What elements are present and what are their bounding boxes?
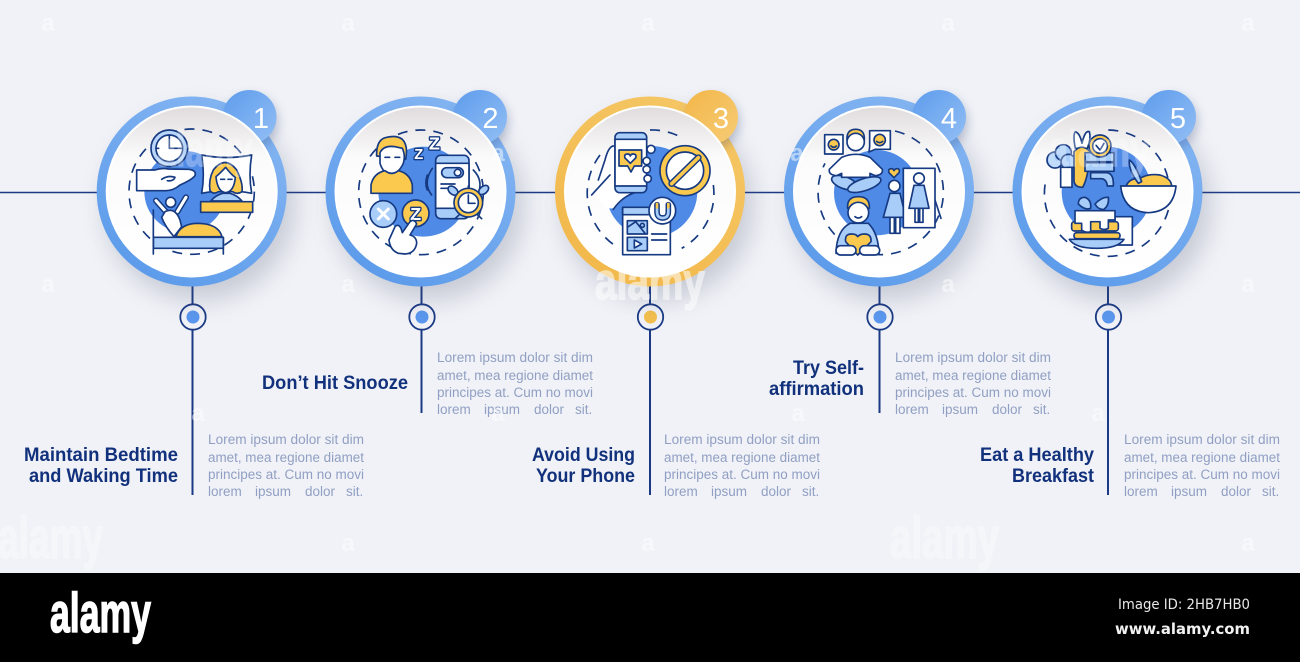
badge 5 <box>1142 90 1196 144</box>
stock watermarks: a <box>791 400 805 427</box>
step 5 heading: Breakfast <box>1012 466 1095 487</box>
step 5 connector and node <box>1096 285 1121 495</box>
icon: meditating man, heart and mirror <box>818 129 943 255</box>
badge 5: 5 <box>1170 103 1186 135</box>
icon: phone in hand, prohibition sign, magnet <box>587 130 714 255</box>
step 4 description: Lorem ipsum dolor sit dim <box>895 350 1051 365</box>
icon: healthy breakfast foods <box>1044 130 1176 256</box>
step 3 description: dolor <box>761 484 792 499</box>
stock watermarks: a <box>41 10 55 37</box>
stock watermarks: a <box>341 271 355 298</box>
step 2 description: ipsum <box>484 402 520 417</box>
badge 2: 2 <box>482 103 499 135</box>
step 3 description: sit. <box>802 484 819 499</box>
stock watermarks: a <box>1241 530 1255 557</box>
step 1 description: ipsum <box>255 484 291 499</box>
badge 2 <box>453 90 507 144</box>
image id and website <box>1115 597 1250 638</box>
icon: sleep schedule with clock, woman and bed <box>129 129 254 254</box>
step 5 heading: Eat a Healthy <box>980 445 1094 466</box>
step 2 description: dolor <box>534 402 565 417</box>
step 4 heading: Try Self- <box>793 358 864 379</box>
step 2 description: amet, mea regione diamet <box>437 368 593 383</box>
step 5 description: lorem <box>1124 484 1158 499</box>
step 3 heading <box>532 445 635 487</box>
step 1 connector and node <box>180 285 206 495</box>
badge 3: 3 <box>713 103 729 135</box>
step 1 heading <box>24 445 178 487</box>
icon: sleeping man, phone alarm and snooze button: Z <box>429 133 440 153</box>
panel: step 3 circle (highlighted) <box>555 90 745 286</box>
stock watermarks: a <box>941 10 955 37</box>
step 4 description: lorem <box>895 402 929 417</box>
step 1 description: Lorem ipsum dolor sit dim <box>208 432 364 447</box>
step 2 description: sit. <box>575 402 592 417</box>
step 1 heading: and Waking Time <box>29 466 178 487</box>
stock watermarks: a <box>941 271 955 298</box>
step 1 description <box>208 432 364 499</box>
step 2 heading: Don’t Hit Snooze <box>262 373 408 394</box>
step 3 description: lorem <box>664 484 698 499</box>
stock watermarks: a <box>341 10 355 37</box>
step 3 description: ipsum <box>711 484 747 499</box>
stock watermarks: a <box>1241 271 1255 298</box>
step 4 heading: affirmation <box>769 379 864 400</box>
stock watermarks: a <box>641 530 655 557</box>
step 2 description <box>437 350 593 417</box>
footer bar <box>0 573 1300 662</box>
step 3 description: amet, mea regione diamet <box>664 450 820 465</box>
step 2 connector and node <box>409 285 435 413</box>
step 3 description: principes at. Cum no movi <box>664 467 820 482</box>
badge 1: 1 <box>253 103 269 135</box>
stock watermarks: a <box>491 400 505 427</box>
step 3 connector and node <box>638 285 663 495</box>
stock watermarks: alamy <box>1048 121 1150 177</box>
stock watermarks: a <box>1091 400 1105 427</box>
step 4 connector and node <box>867 285 893 413</box>
step 4 description: principes at. Cum no movi <box>895 385 1051 400</box>
stock watermarks: alamy <box>595 253 705 311</box>
step 2 description: Lorem ipsum dolor sit dim <box>437 350 593 365</box>
step 3 description <box>664 432 820 499</box>
step 5 description: amet, mea regione diamet <box>1124 450 1280 465</box>
stock watermarks: a <box>1241 10 1255 37</box>
stock watermarks: alamy <box>0 506 103 571</box>
step 1 description: dolor <box>305 484 336 499</box>
image id and website: www.alamy.com <box>1115 620 1250 638</box>
step 1 description: sit. <box>346 484 363 499</box>
step 5 description <box>1124 432 1280 499</box>
icon: sleeping man, phone alarm and snooze button: Z <box>414 147 423 163</box>
step 4 description: ipsum <box>942 402 978 417</box>
step 4 heading <box>769 358 864 400</box>
step 4 description: sit. <box>1033 402 1050 417</box>
stock watermarks: a <box>341 530 355 557</box>
step 5 description: ipsum <box>1171 484 1207 499</box>
step 5 description: sit. <box>1262 484 1279 499</box>
stock watermarks: a <box>641 10 655 37</box>
panel: step 1 circle <box>97 90 287 286</box>
timeline horizontal line <box>0 192 1300 194</box>
step 3 heading: Avoid Using <box>532 445 635 466</box>
step 2 description: lorem <box>437 402 471 417</box>
step 3 heading: Your Phone <box>536 466 635 487</box>
step 2 description: principes at. Cum no movi <box>437 385 593 400</box>
icon: sleeping man, phone alarm and snooze button <box>359 130 490 255</box>
badge 4 <box>912 90 966 144</box>
panel: step 4 circle <box>784 90 974 286</box>
step 5 heading <box>980 445 1095 487</box>
footer logo: alamy <box>50 581 151 644</box>
step 5 description: dolor <box>1221 484 1252 499</box>
stock watermarks: a <box>41 271 55 298</box>
step 1 description: lorem <box>208 484 242 499</box>
panel: step 2 circle <box>326 90 516 286</box>
step 1 description: principes at. Cum no movi <box>208 467 364 482</box>
step 1 heading: Maintain Bedtime <box>24 445 178 466</box>
step 5 description: Lorem ipsum dolor sit dim <box>1124 432 1280 447</box>
step 4 description: dolor <box>992 402 1023 417</box>
badge 4: 4 <box>941 103 957 135</box>
stock watermarks: a <box>491 140 505 167</box>
stock watermarks: alamy <box>890 506 999 571</box>
badge 1 <box>222 90 276 144</box>
step 1 description: amet, mea regione diamet <box>208 450 364 465</box>
icon: sleeping man, phone alarm and snooze button: Z <box>410 204 421 224</box>
image id and website: Image ID: 2HB7HB0 <box>1118 597 1250 613</box>
badge 3 <box>684 90 738 144</box>
stock watermarks: a <box>790 140 804 167</box>
step 5 description: principes at. Cum no movi <box>1124 467 1280 482</box>
step 3 description: Lorem ipsum dolor sit dim <box>664 432 820 447</box>
panel: step 5 circle <box>1012 90 1202 286</box>
step 4 description: amet, mea regione diamet <box>895 368 1051 383</box>
step 4 description <box>895 350 1051 417</box>
stock watermarks: alamy <box>157 121 253 177</box>
stock watermarks: a <box>191 400 205 427</box>
